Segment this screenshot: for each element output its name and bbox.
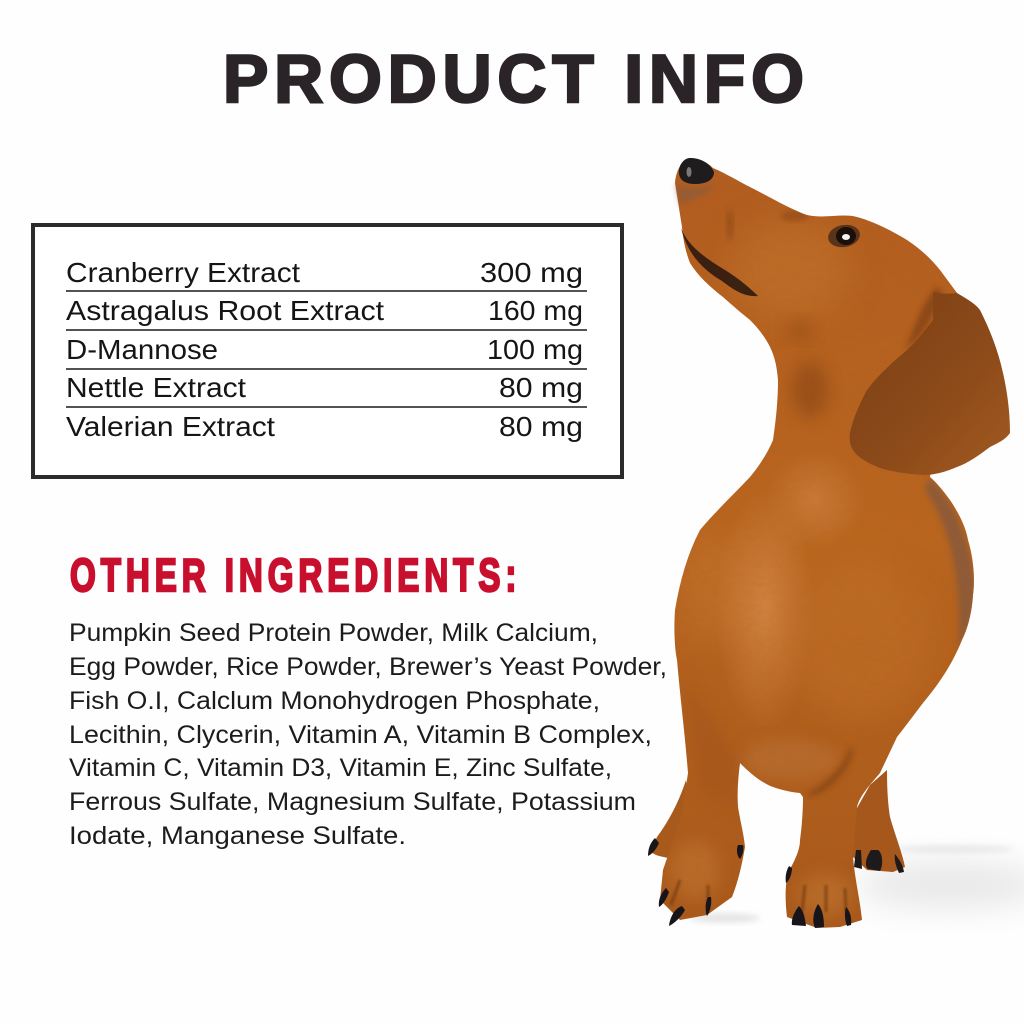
row: astragalus root extract: 160 mg (488, 295, 583, 326)
ear fold (905, 287, 943, 350)
panel: active ingredients table (33, 225, 622, 477)
eye (826, 222, 862, 250)
text block: other ingredients list: Egg Powder, Rice Powder, Brewer’s Yeast Powder, (69, 653, 667, 681)
belly tone (790, 560, 930, 720)
nose (675, 158, 715, 205)
rear left paw (648, 780, 692, 858)
toe lines (671, 880, 846, 912)
text block: other ingredients list: Ferrous Sulfate, Magnesium Sulfate, Potassium (69, 788, 636, 816)
rear right leg (853, 770, 905, 872)
row: astragalus root extract: Astragalus Root Extract (66, 295, 384, 326)
title: PRODUCT INFO (223, 41, 804, 117)
rear right claws (854, 850, 904, 873)
text block: other ingredients list: Vitamin C, Vitamin D3, Vitamin E, Zinc Sulfate, (69, 754, 612, 782)
text block: other ingredients list: Pumpkin Seed Protein Powder, Milk Calcium, (69, 619, 598, 647)
fur shading (658, 208, 1010, 926)
fur texture (640, 150, 1024, 940)
floor shadow (690, 845, 1024, 923)
ear (850, 292, 1010, 475)
row: valerian extract (66, 411, 583, 442)
mouth line (681, 228, 758, 296)
row: d-mannose (66, 334, 583, 365)
row: nettle extract: Nettle Extract (66, 372, 246, 403)
row: cranberry extract (66, 257, 583, 288)
chest highlights (730, 520, 800, 702)
text block: other ingredients list (69, 619, 667, 850)
paw highlights (672, 843, 718, 898)
head tones (739, 214, 836, 318)
body silhouette (660, 158, 974, 928)
left leg shade (680, 670, 738, 810)
heading: other ingredients: OTHER INGREDIENTS: (70, 551, 516, 601)
front left claws (659, 845, 743, 926)
illustration: dachshund (640, 150, 1024, 940)
text block: other ingredients list: Lecithin, Clycerin, Vitamin A, Vitamin B Complex, (69, 721, 652, 749)
row: valerian extract: 80 mg (499, 411, 583, 442)
back dark edge (925, 477, 975, 648)
row: cranberry extract: Cranberry Extract (66, 257, 300, 288)
row: d-mannose: D-Mannose (66, 334, 218, 365)
row: astragalus root extract (66, 295, 583, 326)
row: nettle extract: 80 mg (499, 372, 583, 403)
row: d-mannose: 100 mg (487, 334, 583, 365)
row: cranberry extract: 300 mg (480, 257, 583, 288)
front right claws (786, 866, 851, 928)
text block: other ingredients list: Fish O.I, Calclum Monohydrogen Phosphate, (69, 687, 600, 715)
belly fold (805, 748, 853, 795)
row: valerian extract: Valerian Extract (66, 411, 275, 442)
text block: other ingredients list: Iodate, Manganese Sulfate. (69, 822, 406, 850)
row: nettle extract (66, 372, 583, 403)
table border (33, 225, 622, 477)
